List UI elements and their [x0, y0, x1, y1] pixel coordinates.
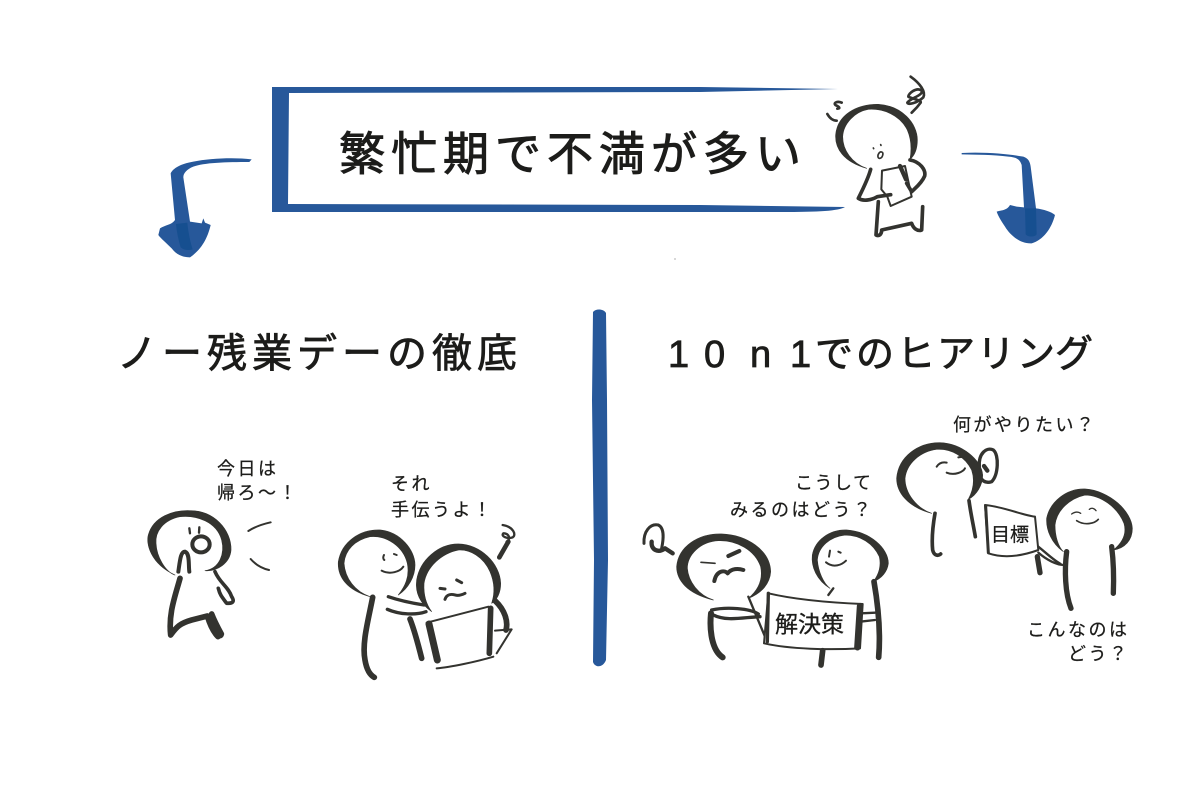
- speech: how about this: みるのはどう？: [730, 500, 874, 520]
- smiling person body: [828, 588, 875, 622]
- speech: how about something like this: どう？: [1068, 644, 1130, 664]
- speech: how about this: [730, 473, 874, 520]
- helper head: [338, 530, 415, 597]
- speech: going home today: [217, 459, 299, 503]
- speech: how about something like this: こんなのは: [1027, 620, 1130, 640]
- thinking scribble: [644, 525, 663, 548]
- worried head: [416, 544, 501, 612]
- figures: solution discussion: [644, 525, 888, 665]
- speech: let me help: 手伝うよ！: [391, 500, 494, 520]
- goal sheet: [985, 505, 1038, 556]
- worried face: [440, 580, 465, 599]
- sweat marks: [827, 102, 842, 121]
- face: [873, 145, 883, 158]
- figure: stressed person holding a document: [827, 77, 925, 236]
- stress mark: [499, 542, 508, 557]
- speech: how about something like this: [1027, 620, 1130, 664]
- arrow: left down: [158, 158, 252, 257]
- facing face: [1072, 508, 1096, 514]
- body and arms: [858, 160, 925, 236]
- frowning face: [701, 562, 715, 563]
- label: goal: 目標: [991, 524, 1029, 546]
- listening body: [932, 501, 975, 555]
- title: 繁忙期で不満が多い: [339, 128, 807, 180]
- speech: what do you want to do: 何がやりたい？: [953, 415, 1096, 435]
- arms and body: [712, 608, 760, 619]
- speech: going home today: 帰ろ〜！: [217, 483, 299, 503]
- hand and body: [178, 552, 189, 572]
- arrow: right down: [962, 153, 1055, 243]
- speech: let me help: [391, 474, 494, 520]
- shout marks: [248, 522, 271, 570]
- heading: 1on1 hearing: 10n1でのヒアリング: [668, 334, 1093, 376]
- facing head: [1047, 489, 1132, 552]
- face and mouth: [189, 527, 199, 533]
- divider: [592, 309, 608, 666]
- heading: no overtime day: ノー残業デーの徹底: [117, 332, 522, 376]
- helper face: [382, 554, 403, 573]
- figures: coworker helping: [338, 525, 514, 677]
- smiling face: [826, 551, 846, 566]
- speech: going home today: 今日は: [217, 459, 278, 479]
- document: [881, 166, 912, 206]
- speech: how about this: こうして: [795, 473, 872, 493]
- speech: let me help: それ: [391, 474, 432, 494]
- figures: goal discussion: [897, 443, 1132, 608]
- listening face: [937, 457, 967, 474]
- frowning head: [677, 534, 771, 600]
- speck: [674, 258, 676, 260]
- title frame: [272, 87, 845, 212]
- listening head: [897, 443, 983, 513]
- head: [148, 511, 231, 575]
- book and arm: [427, 607, 512, 668]
- facing body and arms: [1038, 547, 1064, 565]
- smiling head: [812, 530, 888, 588]
- ear: [979, 449, 997, 482]
- stress scribble: [907, 77, 924, 113]
- helper body and arm: [364, 597, 374, 677]
- board: [764, 593, 863, 649]
- head: [836, 104, 917, 168]
- figure: person leaving on time: [148, 511, 271, 637]
- label: solution: 解決策: [775, 611, 844, 637]
